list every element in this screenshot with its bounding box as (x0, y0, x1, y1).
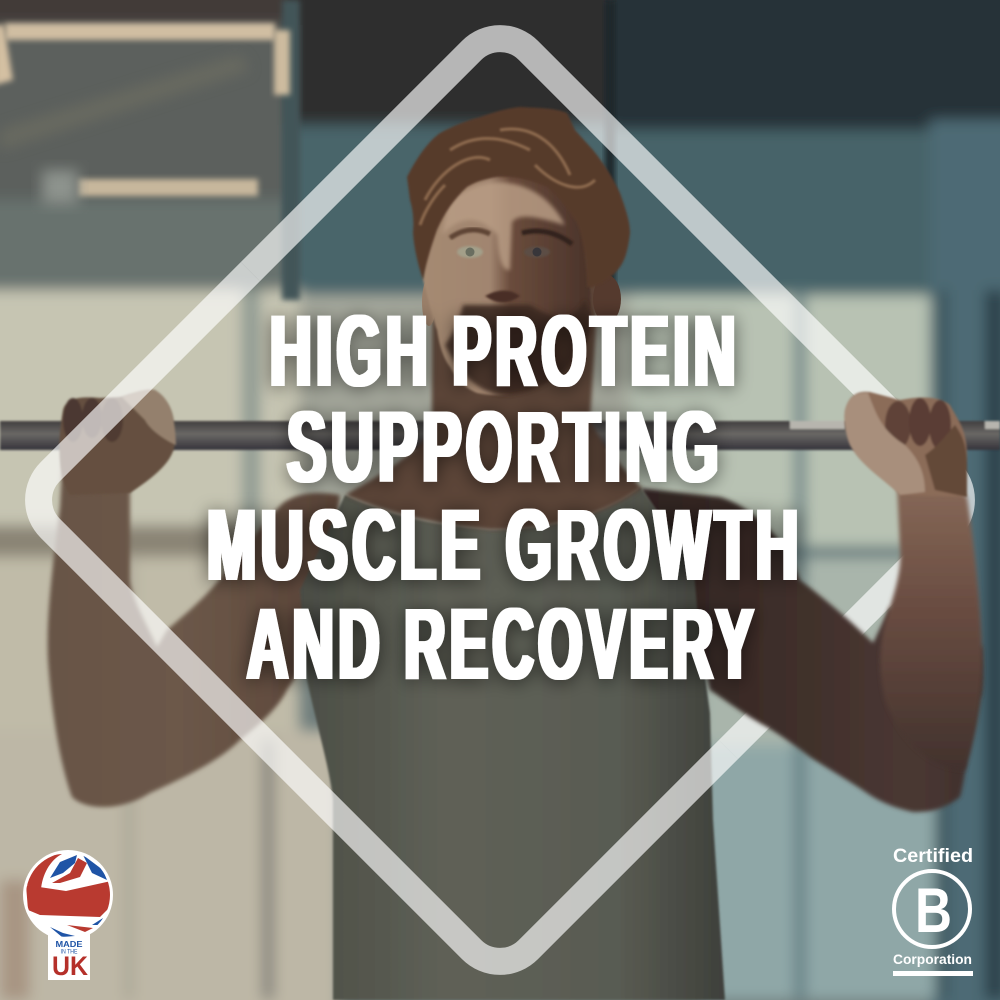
right arm: bicep (640, 488, 983, 812)
badge: certified B corporation: Corporation (893, 951, 972, 967)
badge: made in the UK (23, 850, 113, 981)
badge: made in the UK: MADE (56, 939, 83, 949)
right ear (593, 275, 621, 323)
left fist (59, 389, 176, 495)
neck and chest (345, 270, 642, 530)
hair (407, 107, 630, 287)
face (423, 165, 591, 395)
barbell (0, 421, 1000, 450)
diamond outline: part in front of the arms (25, 262, 738, 975)
left arm (48, 450, 340, 807)
left ear (422, 278, 436, 326)
beard (445, 300, 592, 395)
forehead highlight (442, 182, 565, 270)
badge: certified B corporation (893, 846, 973, 976)
hair highlights (420, 129, 595, 225)
right forearm (880, 470, 982, 770)
badge: made in the UK: IN THE (60, 950, 78, 956)
union flag globe (26, 854, 112, 937)
badge: certified B corporation: B (915, 876, 952, 946)
headline (207, 294, 803, 701)
diamond outline: part behind the man (241, 25, 975, 759)
brows, eyes and nose (450, 230, 572, 302)
badge: certified B corporation: Certified (893, 846, 973, 867)
right fist (844, 392, 967, 497)
badge: made in the UK: UK (52, 951, 88, 981)
tank top (300, 487, 725, 1000)
